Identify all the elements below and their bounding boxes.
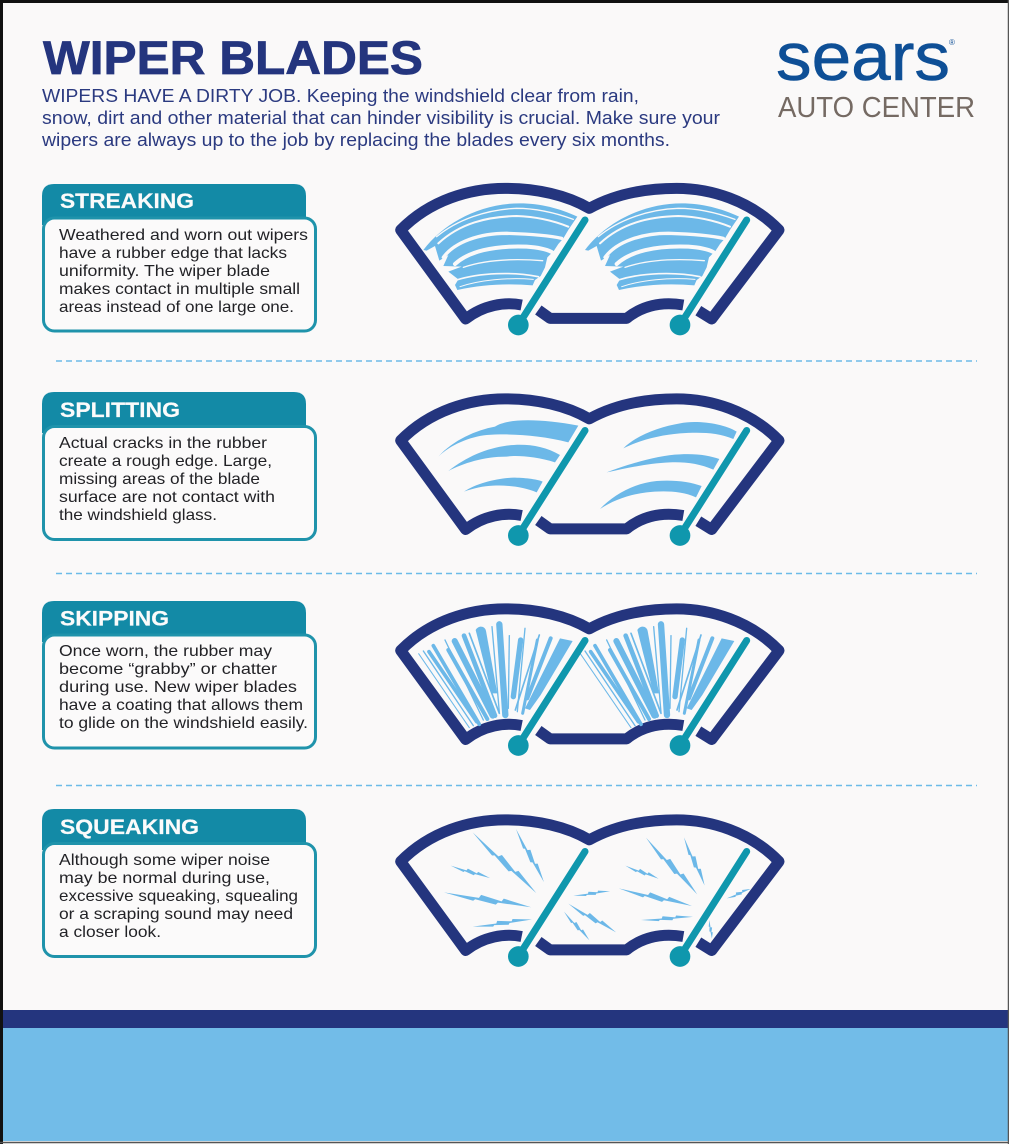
panel: streaking	[42, 184, 316, 331]
body: skipping: have a coating that allows them	[59, 697, 303, 714]
footer band: dark	[0, 1010, 1009, 1028]
body: skipping: become “grabby” or chatter	[59, 661, 278, 678]
panel: skipping	[42, 601, 316, 748]
body: squeaking: may be normal during use,	[59, 870, 270, 887]
intro text: snow, dirt and other material that can hinder visibility is crucial. Make sure your	[42, 108, 720, 128]
panel: splitting	[42, 392, 316, 540]
intro text: wipers are always up to the job by replacing the blades every six months.	[41, 130, 670, 150]
divider	[56, 360, 977, 362]
logo: sears auto center: ®	[949, 38, 955, 47]
body: streaking: areas instead of one large one.	[59, 299, 294, 316]
tab: squeaking	[42, 809, 306, 850]
body: squeaking: Although some wiper noise	[59, 852, 270, 869]
body: streaking	[59, 227, 308, 316]
heading: skipping: SKIPPING	[60, 608, 169, 630]
body: squeaking	[59, 852, 298, 941]
body: streaking: uniformity. The wiper blade	[59, 263, 270, 280]
intro text	[41, 86, 720, 150]
title: WIPER BLADES	[43, 31, 423, 84]
text box: squeaking	[44, 844, 316, 956]
divider	[56, 572, 977, 574]
body: squeaking: excessive squeaking, squealing	[59, 888, 298, 905]
windshield: squeaking	[401, 820, 779, 967]
body: splitting: missing areas of the blade	[59, 471, 260, 488]
tab: skipping	[42, 601, 306, 642]
logo: sears auto center: AUTO CENTER	[778, 92, 975, 124]
tab: streaking	[42, 184, 306, 225]
body: streaking: Weathered and worn out wipers	[59, 227, 308, 244]
text box: streaking	[44, 218, 316, 331]
lightning bolts	[443, 828, 751, 941]
tab: splitting	[42, 392, 306, 433]
body: skipping: during use. New wiper blades	[59, 679, 297, 696]
body: squeaking: or a scraping sound may need	[59, 906, 293, 923]
body: streaking: makes contact in multiple small	[59, 281, 300, 298]
rubber split marks	[438, 420, 737, 509]
heading: squeaking: SQUEAKING	[60, 816, 199, 839]
body: skipping	[59, 643, 308, 732]
body: splitting: surface are not contact with	[59, 489, 275, 506]
heading: streaking: STREAKING	[60, 190, 194, 213]
body: squeaking: a closer look.	[59, 924, 161, 941]
logo: sears auto center: sears	[776, 19, 950, 95]
windshield: skipping	[401, 609, 779, 756]
logo: sears auto center	[776, 19, 975, 124]
body: splitting: create a rough edge. Large,	[59, 453, 272, 470]
body: splitting: the windshield glass.	[59, 507, 217, 524]
windshield: splitting	[401, 399, 779, 546]
divider	[56, 784, 977, 786]
windshield: streaking	[401, 188, 779, 335]
heading: splitting: SPLITTING	[60, 399, 180, 422]
body: splitting	[59, 435, 275, 524]
intro text: WIPERS HAVE A DIRTY JOB. Keeping the windshield clear from rain,	[42, 86, 639, 106]
body: skipping: Once worn, the rubber may	[59, 643, 272, 660]
body: splitting: Actual cracks in the rubber	[59, 435, 268, 452]
footer band: light blue	[0, 1028, 1009, 1141]
body: skipping: to glide on the windshield easily.	[59, 715, 308, 732]
text box: skipping	[44, 635, 316, 748]
body: streaking: have a rubber edge that lacks	[59, 245, 287, 262]
text box: splitting	[44, 426, 316, 540]
panel: squeaking	[42, 809, 316, 956]
